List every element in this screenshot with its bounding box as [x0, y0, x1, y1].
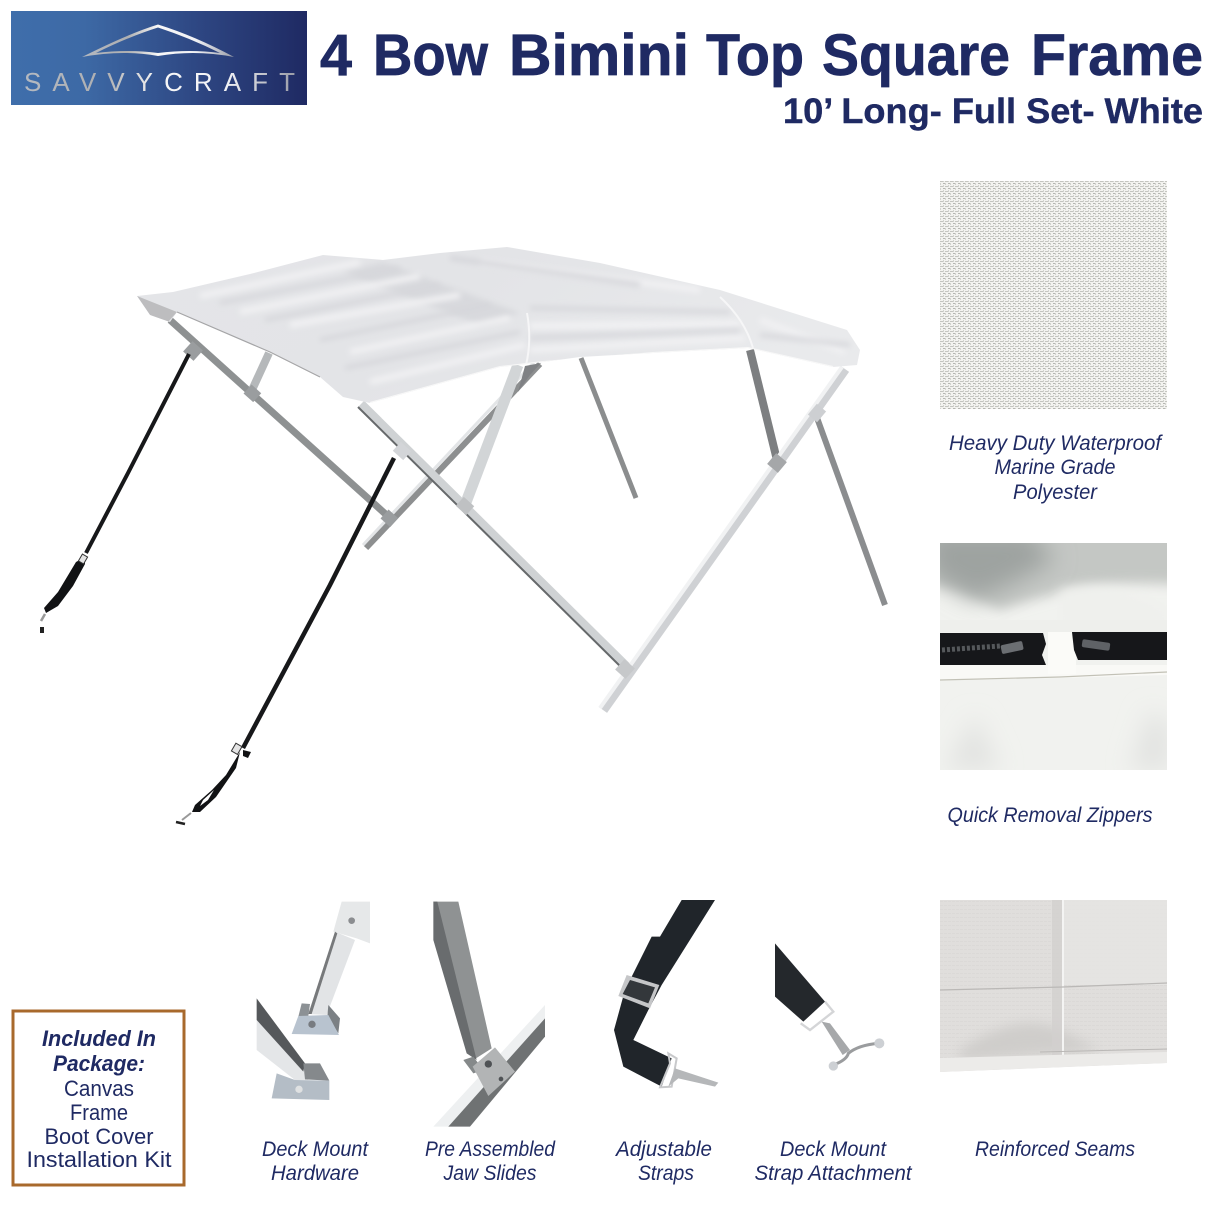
title: 4 — [320, 23, 352, 88]
panel: fabric swatch — [940, 181, 1167, 409]
frame members — [170, 320, 885, 710]
detail photo: deck mount strap attachment — [775, 943, 884, 1071]
detail photo: deck mount hardware — [257, 902, 370, 1100]
main product photo: bimini top — [40, 247, 885, 824]
strap: left — [40, 354, 189, 633]
title: Frame — [1031, 23, 1203, 88]
title: Square — [822, 23, 1010, 88]
strap: front — [176, 458, 394, 824]
detail photo: jaw slides — [433, 902, 545, 1127]
zipper tape right — [1072, 632, 1167, 660]
caption: deck mount hardware — [262, 1138, 369, 1185]
callout: included in package — [13, 1011, 184, 1185]
icon: logo canopy mark — [82, 24, 234, 57]
caption: seams: Reinforced Seams — [975, 1138, 1135, 1161]
subtitle: 10’ Long- Full Set- White — [783, 92, 1203, 131]
caption: strap attachment: Deck Mount — [780, 1138, 887, 1161]
caption: deck mount hardware: Deck Mount — [262, 1138, 369, 1161]
caption: fabric: Polyester — [1013, 481, 1098, 504]
caption: jaw slides — [425, 1138, 556, 1185]
callout: included in package: Package: — [53, 1051, 145, 1076]
caption: fabric: Heavy Duty Waterproof — [949, 432, 1163, 455]
logo: Savvycraft — [11, 11, 307, 105]
logo wordmark: SAVVYCRAFT — [24, 67, 295, 97]
caption: zippers: Quick Removal Zippers — [948, 804, 1153, 827]
caption: adjustable straps: Straps — [638, 1162, 694, 1185]
caption: jaw slides: Pre Assembled — [425, 1138, 556, 1161]
callout: included in package: Canvas — [64, 1076, 134, 1101]
caption: adjustable straps: Adjustable — [614, 1138, 712, 1161]
frame brackets — [183, 341, 826, 679]
caption: fabric: Marine Grade — [994, 456, 1116, 479]
zipper tape left — [940, 633, 1046, 665]
title: Top — [706, 23, 804, 88]
callout: included in package: Boot Cover — [44, 1124, 154, 1149]
callout: included in package: Frame — [70, 1100, 128, 1125]
caption: strap attachment — [754, 1138, 913, 1185]
canopy — [137, 247, 860, 403]
caption: strap attachment: Strap Attachment — [754, 1162, 913, 1185]
caption: fabric — [949, 432, 1163, 504]
caption: adjustable straps — [614, 1138, 712, 1185]
panel: zipper photo — [940, 543, 1167, 770]
title: Bimini — [509, 23, 689, 88]
caption: jaw slides: Jaw Slides — [443, 1162, 537, 1185]
callout: included in package: Installation Kit — [26, 1147, 172, 1172]
caption: deck mount hardware: Hardware — [271, 1162, 359, 1185]
callout: included in package: Included In — [42, 1026, 156, 1051]
title: Bow — [373, 23, 489, 88]
title — [320, 23, 1203, 88]
panel: reinforced seams photo — [940, 900, 1167, 1075]
detail photo: adjustable straps — [614, 900, 718, 1087]
